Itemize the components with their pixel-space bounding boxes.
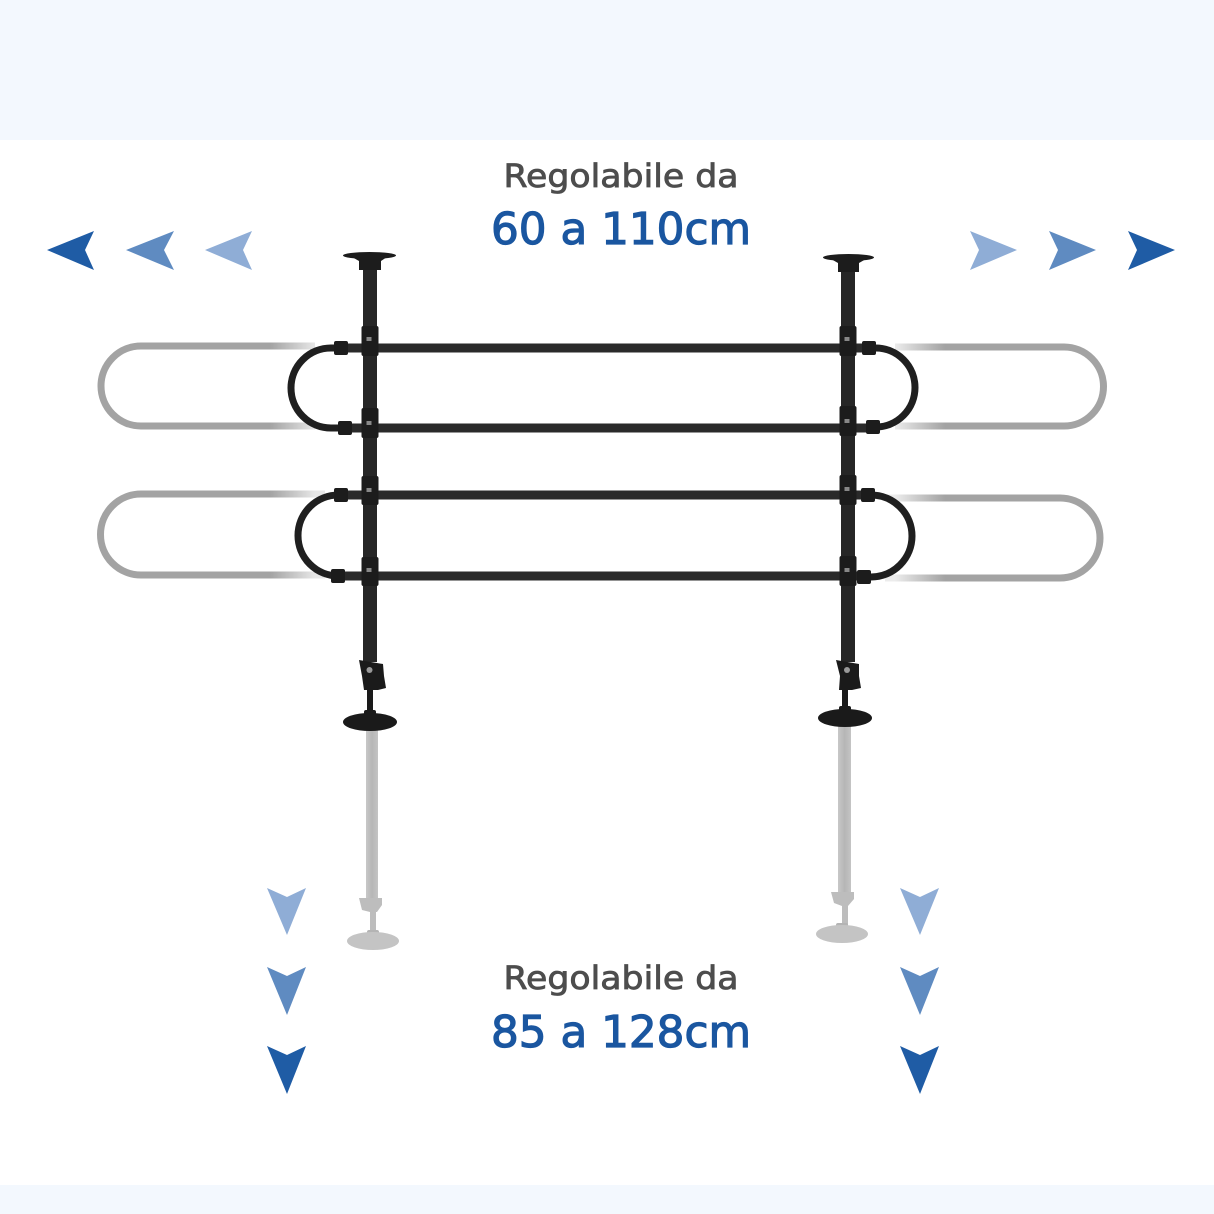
heading: width range: Regolabile da	[504, 157, 738, 195]
right upright pole with top suction cup	[823, 254, 874, 662]
arrows pointing down, right column	[900, 888, 939, 1094]
extended loops, left (ghost)	[100, 346, 325, 575]
arrows pointing left	[47, 231, 252, 270]
heading: height range: 85 a 128cm	[491, 1007, 751, 1058]
barrier: rail connectors	[331, 341, 880, 584]
barrier: left retracted loops	[291, 348, 342, 576]
arrows pointing down, left column	[267, 888, 306, 1094]
heading: width range	[491, 157, 751, 255]
extended loops, right (ghost)	[885, 347, 1104, 578]
top band	[0, 0, 1214, 140]
arrows pointing right	[970, 231, 1175, 270]
barrier: horizontal rails	[340, 348, 872, 576]
left adjuster and bottom suction cup	[343, 660, 397, 731]
heading: width range: 60 a 110cm	[491, 204, 751, 255]
extended leg, right (ghost)	[816, 726, 868, 943]
right adjuster and bottom suction cup	[818, 660, 872, 727]
extended leg, left (ghost)	[347, 730, 399, 950]
barrier: right retracted loops	[865, 348, 915, 577]
left upright pole with top suction cup	[343, 252, 396, 662]
bottom band	[0, 1185, 1214, 1214]
heading: height range	[491, 959, 751, 1058]
heading: height range: Regolabile da	[504, 959, 738, 997]
